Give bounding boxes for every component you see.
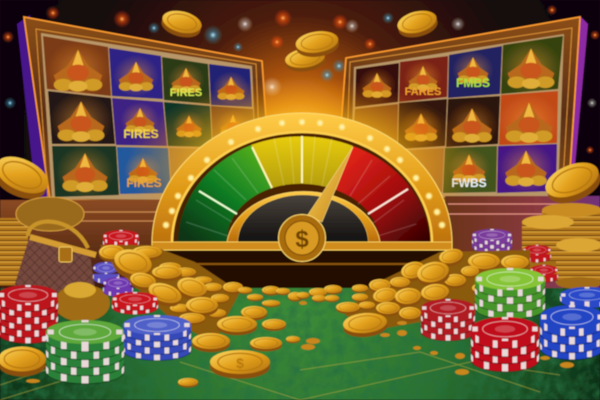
green sector (178, 145, 272, 242)
screen (41, 33, 258, 200)
scattered coins on felt (26, 301, 574, 383)
sector rays (186, 136, 416, 236)
cell r1c3 (162, 57, 210, 104)
cell r2c3 (164, 102, 212, 147)
pile backing right (345, 250, 530, 330)
coin top left (159, 7, 204, 41)
felt (0, 288, 600, 400)
dark dial (238, 195, 368, 242)
cell r3c1 (396, 148, 444, 195)
wall left (0, 200, 160, 292)
sector divider green yellow (252, 147, 272, 188)
chips green right (475, 268, 545, 319)
bag top (16, 197, 84, 231)
big tilted coin left (0, 149, 54, 207)
gauge inner groove (172, 132, 432, 245)
gauge outer rim (152, 113, 452, 250)
trim left (52, 212, 158, 221)
wall right (445, 196, 600, 291)
base dark band (148, 250, 458, 292)
frame inner line (345, 28, 572, 203)
stack back right (542, 210, 600, 242)
needle hub (278, 214, 326, 262)
stack middle right (522, 215, 574, 275)
dollar on front coin: $ (236, 355, 244, 371)
chips purple back right (472, 229, 512, 253)
chips purple left (93, 262, 119, 284)
chip stacks front (0, 268, 600, 384)
right slot panel (335, 16, 588, 210)
green felt table (0, 288, 600, 400)
cell r2c2 (398, 99, 447, 149)
cell r1c2: FARES (405, 86, 441, 98)
inner arc (227, 191, 380, 242)
felt mottling (0, 288, 600, 400)
needle hub: $ (295, 226, 309, 253)
cell r3c2: FIRES (126, 176, 162, 190)
coin front centre (294, 29, 340, 60)
cell r2c1 (352, 104, 398, 152)
bag clasp (59, 247, 72, 262)
screen (350, 34, 564, 199)
left slot panel (17, 15, 270, 210)
pouch nuggets (64, 282, 96, 298)
cell r2c2 (112, 98, 167, 146)
chips violet left (103, 277, 133, 297)
bokeh lights (2, 5, 600, 154)
panel side (566, 16, 588, 198)
bag body (14, 235, 95, 292)
cell r3c2: FWBS (451, 176, 487, 190)
coin pile (0, 245, 529, 388)
chips red back right (523, 245, 558, 283)
coin rear centre (284, 46, 327, 74)
small chip stacks back (93, 229, 558, 297)
flying coins (159, 7, 440, 74)
cell r3c3 (169, 148, 216, 193)
cell r3c2 (443, 146, 497, 193)
chips red small (112, 292, 158, 315)
chips blue left (123, 315, 191, 360)
cell r2c4 (211, 106, 255, 150)
red sector (336, 146, 430, 242)
cell r1c1 (355, 63, 399, 107)
felt gold lines (0, 345, 560, 400)
chips red dotted (421, 299, 475, 341)
green tick (199, 191, 237, 214)
cell r1c3: FMBS (456, 76, 490, 90)
cell r2c4 (498, 91, 560, 151)
stack back left (0, 218, 28, 286)
bag band (30, 237, 96, 255)
cell r3c1 (52, 144, 119, 200)
chips red front (471, 317, 539, 372)
coin bag (14, 197, 110, 322)
gold pouch (54, 284, 110, 322)
chips blue back right (560, 287, 600, 308)
frame inner line (36, 29, 262, 205)
cell r1c2 (399, 56, 448, 102)
needle (307, 147, 353, 222)
cell r2c2: FIRES (123, 127, 159, 141)
marquee bulbs (163, 119, 445, 228)
cell r1c2 (109, 48, 163, 99)
cell r1c3 (448, 46, 502, 98)
gold stacks right (522, 156, 600, 289)
panel frame (335, 17, 580, 210)
coin top right (395, 7, 440, 41)
chips blue right (540, 305, 600, 360)
cell r1c3: FIRES (170, 87, 202, 99)
cell r1c4 (209, 64, 252, 107)
cell r2c1 (48, 91, 115, 150)
chips green left (46, 320, 124, 384)
trim right (448, 204, 560, 214)
cell r2c3 (446, 96, 500, 149)
pile backing left (100, 245, 240, 345)
gold stacks left (0, 149, 54, 286)
bag handle (28, 222, 88, 248)
yellow sector (251, 136, 353, 190)
big tilted coin right (540, 156, 600, 210)
panel frame (24, 17, 270, 210)
chips red back left (103, 230, 139, 250)
wall under panels (0, 196, 600, 292)
gauge (152, 113, 452, 265)
sector tick centre (301, 136, 303, 183)
cell r1c1 (43, 36, 111, 100)
gauge glow (127, 77, 477, 253)
red tick (368, 189, 408, 214)
cell r1c4 (500, 36, 563, 97)
base lower trim (190, 263, 415, 265)
gauge base band (152, 242, 452, 250)
cell r3c2 (117, 147, 171, 194)
panel side (17, 15, 52, 200)
stack front right (556, 238, 600, 289)
cell r3c3 (497, 143, 557, 193)
chips red left (0, 285, 58, 344)
